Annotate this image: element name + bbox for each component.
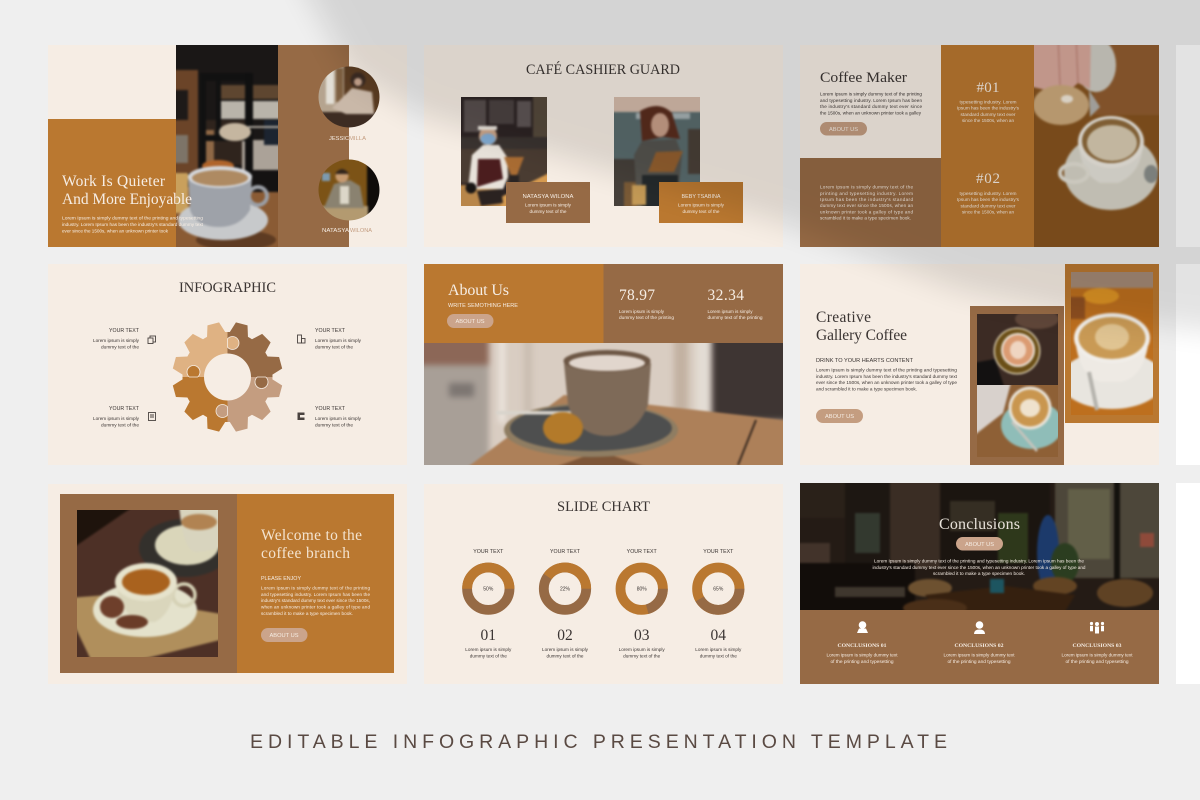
item: conclusions 01	[826, 621, 898, 664]
stat: 32.34: dummy text of the printing	[708, 315, 763, 320]
chart: donut 04 65%: 65%	[713, 586, 724, 592]
text: top left label: YOUR TEXT	[109, 328, 140, 334]
heading: slide chart: SLIDE CHART	[557, 499, 650, 515]
text: coffee maker body: the industry's standard dummy text ever since	[820, 104, 922, 109]
card: natasya wilona	[506, 182, 590, 223]
panel: slide 9 conclusions	[790, 473, 1169, 684]
icon: people group	[1090, 622, 1104, 634]
chart: donut 04 65%: dummy text of the	[700, 654, 737, 658]
panel: slide 8 slide chart	[424, 484, 783, 684]
text: name labels	[322, 136, 373, 234]
heading: welcome: coffee branch	[261, 545, 350, 562]
panel: partial next-column slides	[1176, 45, 1200, 684]
card: beby tsabina: BEBY TSABINA	[682, 194, 721, 200]
text: welcome body: when an unknown printer took a galley of type and	[261, 604, 370, 610]
card: beby tsabina: dummy text of the	[682, 209, 720, 214]
callout: #01: #01	[976, 80, 1000, 96]
icon: briefcase bottom right	[298, 412, 304, 420]
text: gallery body: Lorem Ipsum is simply dummy text of the printing and typesetting	[816, 368, 957, 372]
text: name labels: MILLA	[349, 136, 367, 142]
text: top right label: dummy text of the	[315, 344, 353, 350]
heading: creative gallery coffee	[816, 309, 907, 344]
text: brown panel body: unknown printer took a galley of type and	[820, 210, 913, 214]
text: conclusions body	[872, 558, 1086, 576]
item: conclusions 03: of the printing and typesetting	[1066, 659, 1129, 664]
item: conclusions 01: Lorem ipsum is simply dummy text	[826, 652, 898, 658]
text: brown panel body: printing and typesetting industry. Lorem	[820, 191, 913, 196]
text: bottom left label: YOUR TEXT	[109, 406, 140, 412]
text: gallery subheading: DRINK TO YOUR HEARTS CONTENT	[816, 358, 914, 364]
chart: donut 01 50%	[465, 549, 512, 658]
photo frame: latte on orange	[1060, 262, 1164, 425]
text: name labels: JESSIC	[329, 136, 349, 142]
photo: cup on saucer	[424, 343, 783, 465]
card: natasya wilona: Lorem ipsum is simply	[525, 202, 572, 208]
button: about us: ABOUT US	[456, 319, 485, 325]
heading: about us: About Us	[448, 282, 509, 299]
heading: slide 1 title: Work Is Quieter	[62, 173, 166, 190]
chart: donut 01 50%: 50%	[483, 586, 494, 592]
card: natasya wilona: dummy text of the	[530, 209, 567, 214]
chart: donut 04 65%: YOUR TEXT	[703, 549, 734, 555]
stat: 78.97: Lorem ipsum is simply	[619, 309, 665, 314]
text: bottom left label	[93, 406, 140, 428]
text: slide 1 body: industry. Lorem Ipsum has been the industry's standard dummy text	[62, 222, 204, 227]
chart: gear of four puzzle pieces	[172, 322, 282, 432]
text: slide 1 body: ever since the 1500s, when an unknown printer took	[62, 228, 169, 234]
text: coffee maker body	[820, 92, 922, 116]
button: about us	[820, 122, 867, 136]
text: coffee maker body: the 1500s, when an unknown printer took a galley	[820, 110, 922, 116]
panel: slide 5 about us	[414, 264, 793, 475]
icon: documents top left	[148, 336, 156, 344]
text: bottom left label: Lorem ipsum is simply	[93, 416, 140, 421]
text: welcome body	[261, 586, 370, 616]
text: brown panel body: dummy text ever since the 1500s, when an	[820, 203, 913, 208]
callout: #02: Ipsum has been the industry's	[957, 197, 1020, 202]
chart: donut 02 22%: Lorem ipsum is simply	[542, 647, 589, 652]
callout: #01: since the 1500s, when an	[962, 118, 1014, 123]
text: conclusions body: Lorem Ipsum is simply dummy text of the printing and typesetting industry. Lorem Ipsum has been the	[874, 558, 1084, 564]
callout: #01: typesetting industry. Lorem	[960, 100, 1017, 104]
icon: person	[974, 621, 985, 634]
photo: cashier with tablet	[614, 97, 700, 206]
chart: donut 03 80%: 03	[634, 627, 650, 644]
chart: donut 04 65%	[695, 549, 742, 658]
chart: donut 02 22%: dummy text of the	[546, 654, 584, 658]
diagonal window shadow overlay	[290, 0, 1200, 335]
text: gallery body: industry. Lorem Ipsum has been the industry's standard dummy text	[816, 374, 958, 379]
item: conclusions 03: Lorem ipsum is simply dummy text	[1062, 652, 1133, 658]
text: welcome body: industry's standard dummy text ever since the 1500s,	[261, 598, 370, 603]
heading: cafe cashier guard: CAFÉ CASHIER GUARD	[526, 61, 680, 78]
photo: cashier with mask	[461, 97, 547, 206]
panel: slide 1 work is quieter	[48, 35, 407, 257]
text: brown panel body: scrambled it to make a type specimen book.	[820, 216, 911, 220]
stat: 32.34: Lorem ipsum is simply	[708, 309, 753, 314]
text: please enjoy: PLEASE ENJOY	[261, 576, 302, 582]
text: welcome body: scrambled it to make a type specimen book.	[261, 611, 353, 616]
panel: slide 4 infographic gear	[48, 264, 407, 465]
chart: donut 03 80%: Lorem ipsum is simply	[619, 647, 665, 652]
button: about us: ABOUT US	[829, 127, 859, 133]
callout: #01: standard dummy text ever	[960, 112, 1016, 117]
photo: man in circle	[318, 160, 380, 220]
icon: buildings top right	[298, 335, 305, 343]
photo: espresso with cookies	[77, 510, 218, 657]
chart: donut 02 22%: YOUR TEXT	[550, 549, 581, 555]
panel: slide 6 creative gallery	[800, 262, 1164, 467]
text: coffee maker body: Lorem Ipsum is simply dummy text of the printing	[820, 92, 922, 96]
text: welcome body: and typesetting industry. Lorem Ipsum has been the	[261, 592, 370, 597]
stat: 32.34: 32.34	[708, 287, 744, 304]
text: gallery body: and scrambled it to make a type specimen book.	[816, 386, 917, 392]
chart: donut 02 22%: 22%	[560, 586, 571, 592]
text: brown panel body: Lorem Ipsum is simply dummy text of the	[820, 184, 913, 190]
text: top left label: Lorem ipsum is simply	[93, 338, 140, 343]
text: top left label: dummy text of the	[101, 344, 139, 350]
item: conclusions 02: Lorem ipsum is simply dummy text	[944, 652, 1015, 658]
card: natasya wilona: NATASYA WILONA	[522, 194, 574, 200]
icon: notebook bottom left	[148, 412, 156, 420]
chart: donut 03 80%: YOUR TEXT	[627, 549, 658, 555]
heading: welcome	[261, 527, 362, 562]
chart: donut 03 80%	[619, 549, 665, 658]
heading: infographic: INFOGRAPHIC	[179, 280, 276, 296]
item: conclusions 03: CONCLUSIONS 03	[1072, 644, 1122, 649]
item: conclusions 01: CONCLUSIONS 01	[838, 644, 887, 649]
text: bottom right label	[315, 406, 362, 428]
text: name labels: WILONA	[350, 228, 373, 234]
chart: donut 01 50%: 01	[481, 627, 496, 644]
text: slide 1 body	[62, 216, 204, 234]
text: bottom right label: YOUR TEXT	[315, 406, 346, 412]
chart: donut 04 65%: Lorem ipsum is simply	[695, 647, 742, 652]
text: brown panel body: Ipsum has been the industry's standard	[820, 197, 913, 202]
chart: donut 03 80%: dummy text of the	[623, 654, 661, 658]
button: about us: ABOUT US	[965, 542, 995, 548]
item: conclusions 01: of the printing and typesetting	[830, 659, 894, 664]
text: conclusions body: scrambled it to make a type specimen book.	[933, 571, 1025, 576]
text: bottom left label: dummy text of the	[101, 422, 139, 428]
heading: slide 1 title	[62, 173, 192, 208]
text: top right label	[315, 328, 362, 350]
text: conclusions body: industry's standard dummy text ever since the 1500s, when an unknown printer took a galley of type and	[872, 565, 1086, 570]
card: beby tsabina	[659, 182, 743, 223]
heading: welcome: Welcome to the	[261, 527, 362, 544]
heading: creative gallery coffee: Creative	[816, 309, 871, 326]
button: about us	[261, 628, 308, 642]
text: bottom right label: Lorem ipsum is simply	[315, 416, 362, 421]
text: bottom right label: dummy text of the	[315, 422, 353, 428]
panel: slide 7 welcome to the coffee branch	[48, 484, 407, 684]
text: top left label	[93, 328, 140, 350]
stat: 78.97: 78.97	[619, 287, 655, 304]
chart: donut 02 22%: 02	[557, 627, 573, 644]
button: about us	[447, 314, 494, 328]
callout: #02: #02	[976, 171, 1000, 187]
item: conclusions 02: CONCLUSIONS 02	[954, 644, 1004, 649]
heading: creative gallery coffee: Gallery Coffee	[816, 327, 907, 344]
title: bottom caption: EDITABLE INFOGRAPHIC PRESENTATION TEMPLATE	[250, 731, 947, 753]
item: conclusions 02	[944, 621, 1015, 664]
text: coffee maker body: and typesetting industry. Lorem Ipsum has been	[820, 98, 922, 103]
text: top right label: Lorem ipsum is simply	[315, 338, 362, 343]
photo: dark cafe interior	[800, 483, 1159, 610]
photo: woman in circle	[318, 66, 380, 128]
text: gallery body: ever since the 1500s, when an unknown printer took a galley of type	[816, 380, 957, 385]
button: about us	[956, 537, 1003, 550]
chart: donut 01 50%: YOUR TEXT	[473, 549, 504, 555]
callout: #02	[957, 171, 1020, 214]
text: gallery body	[816, 368, 958, 392]
heading: conclusions: Conclusions	[939, 516, 1020, 533]
stat: 78.97	[619, 287, 674, 320]
item: conclusions 02: of the printing and typesetting	[948, 659, 1011, 664]
chart: donut 03 80%: 80%	[637, 586, 647, 592]
button: about us	[816, 409, 863, 423]
photo: latte pour	[1034, 45, 1159, 247]
callout: #02: typesetting industry. Lorem	[960, 191, 1017, 196]
photo: coffee with spoon	[176, 45, 278, 247]
text: brown panel body	[820, 184, 913, 220]
text: name labels: NATASYA	[322, 228, 350, 234]
callout: #01: Ipsum has been the industry's	[957, 106, 1020, 110]
chart: donut 01 50%: Lorem ipsum is simply	[465, 647, 512, 652]
text: slide 1 body: Lorem Ipsum is simply dummy text of the printing and typesetting	[62, 216, 203, 220]
card: beby tsabina: Lorem ipsum is simply	[678, 202, 725, 208]
stat: 32.34	[708, 287, 763, 320]
photo frame: two lattes on brown	[967, 304, 1068, 467]
button: about us: ABOUT US	[825, 414, 855, 420]
callout: #02: standard dummy text ever	[960, 204, 1016, 208]
chart: donut 01 50%: dummy text of the	[470, 654, 507, 658]
heading: coffee maker: Coffee Maker	[820, 70, 907, 86]
chart: donut 02 22%	[542, 549, 589, 658]
panel: slide 3 coffee maker	[800, 35, 1169, 257]
item: conclusions 03	[1062, 622, 1133, 664]
chart: donut 04 65%: 04	[711, 627, 726, 644]
text: write something: WRITE SEMOTHING HERE	[448, 303, 519, 309]
callout: #01	[957, 80, 1020, 123]
panel: slide 2 cafe cashier guard	[424, 45, 783, 247]
heading: slide 1 title: And More Enjoyable	[62, 191, 192, 208]
stat: 78.97: dummy text of the printing	[619, 315, 674, 320]
button: about us: ABOUT US	[270, 633, 299, 639]
icon: person	[857, 621, 868, 633]
text: top right label: YOUR TEXT	[315, 328, 346, 334]
text: welcome body: Lorem Ipsum is simply dummy text of the printing	[261, 586, 370, 590]
callout: #02: since the 1500s, when an	[962, 210, 1014, 214]
